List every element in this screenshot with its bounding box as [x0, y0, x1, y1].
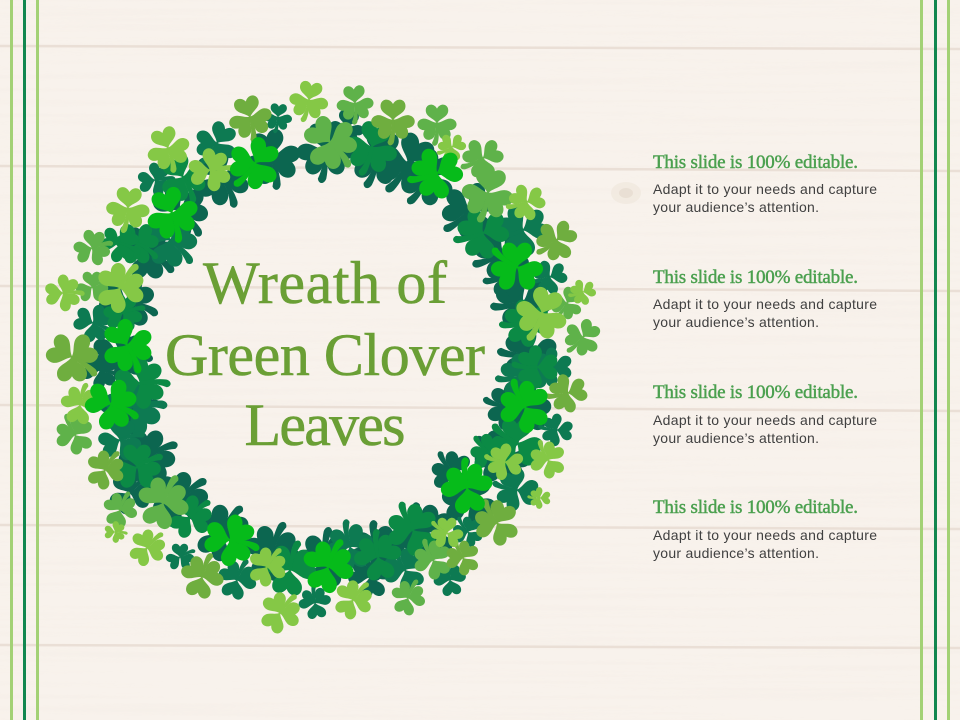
title: Wreath of	[203, 250, 447, 316]
text block 2: your audience’s attention.	[653, 314, 819, 330]
clover layer: medium green	[45, 84, 610, 620]
right border stripes	[920, 0, 950, 720]
clover layer: olive green	[37, 91, 591, 603]
clover layer: lime	[44, 78, 599, 642]
text block 4: This slide is 100% editable.	[653, 497, 858, 518]
text block 2: Adapt it to your needs and capture	[653, 296, 877, 312]
text block 1	[653, 152, 877, 215]
title: Green Clover	[165, 322, 485, 388]
title	[165, 250, 485, 458]
text block 1: your audience’s attention.	[653, 199, 819, 215]
clover layer: dark backing ring	[78, 108, 558, 601]
text block 4: Adapt it to your needs and capture	[653, 527, 877, 543]
title: Leaves	[244, 392, 406, 458]
text block 3: your audience’s attention.	[653, 430, 819, 446]
clover layer: teal and mid green	[68, 102, 574, 621]
left border stripes	[10, 0, 39, 720]
text block 3: This slide is 100% editable.	[653, 382, 858, 403]
text block 4: your audience’s attention.	[653, 545, 819, 561]
text block 1: This slide is 100% editable.	[653, 152, 858, 173]
text block 1: Adapt it to your needs and capture	[653, 181, 877, 197]
clover layer: green	[95, 116, 557, 599]
text block 4	[653, 497, 877, 561]
text block 3	[653, 382, 877, 446]
text block 2	[653, 267, 877, 330]
clover wreath	[37, 78, 610, 642]
clover layer: bright green	[78, 127, 562, 600]
text block 2: This slide is 100% editable.	[653, 267, 858, 288]
text block 3: Adapt it to your needs and capture	[653, 412, 877, 428]
